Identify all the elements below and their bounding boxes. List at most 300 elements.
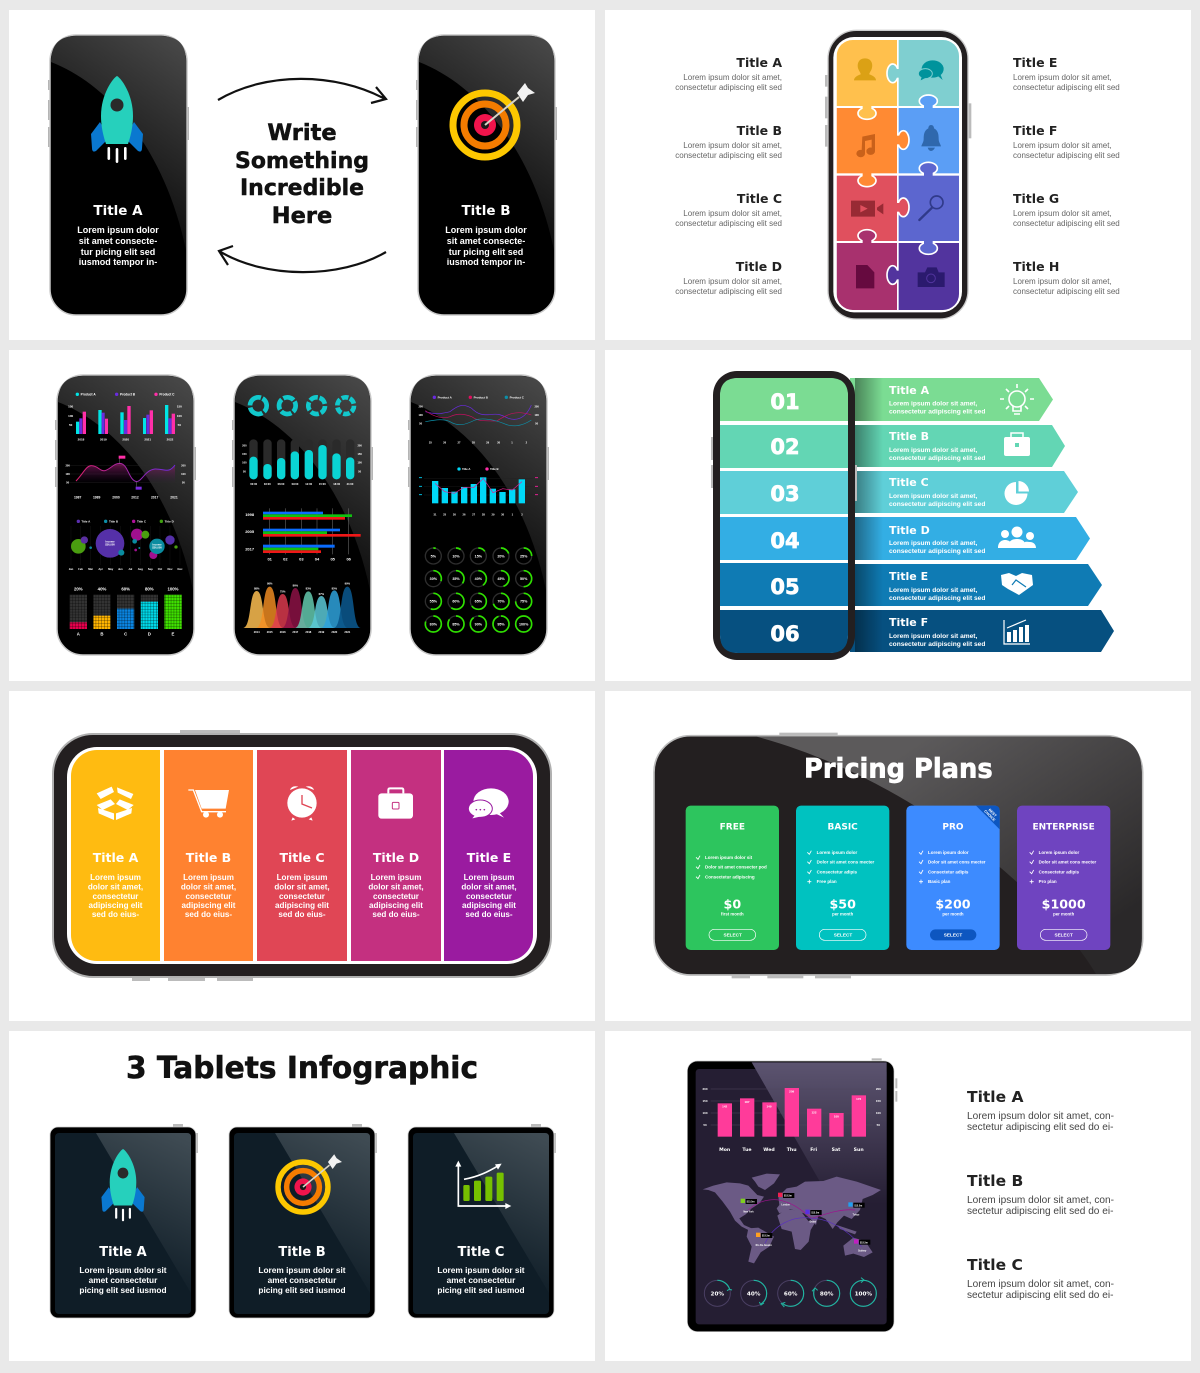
right captions [1013,55,1120,296]
caption: title C: Title C [967,1256,1023,1274]
icon: handshake [1001,573,1033,595]
caption: title A: sectetur adipiscing elit sed do ei- [967,1122,1113,1133]
legend: products: Product A [438,395,453,399]
chart: progress rings: 40% [747,1291,761,1297]
chart: bubbles: Title C [137,519,147,523]
right captions: consectetur adipiscing elit sed [1013,287,1120,296]
chart: capsule bars: 18:00 [333,482,341,486]
panel: three chart phones [9,350,595,681]
center headline: Here [272,203,332,229]
chart: waffle percent: A [77,632,81,637]
tablet B [229,1124,377,1318]
numbered phone [711,371,857,660]
chart: area wave: 100 [65,472,70,476]
plan: pro: Basic plan [928,879,951,884]
column texts [88,850,517,919]
chart: progress rings: 15% [475,554,483,558]
phone numbers: 04 [770,529,800,553]
chart: line series: 30 [497,440,501,444]
chart: area wave [65,456,186,499]
chart: bars with line: 25 [443,513,447,517]
chart: world map: Dubai [810,1222,816,1224]
chart: bars with line: 29 [492,513,495,517]
chart: bell curves: 2015 [267,630,273,634]
chart: grouped bars: 50 [69,423,73,427]
plan: basic: $50 [829,897,856,912]
chart: grouped bars: 150 [177,405,182,409]
column texts: dolor sit amet, [88,882,143,892]
right captions: Lorem ipsum dolor sit amet, [1013,277,1112,286]
legend: products: Product B [474,395,489,399]
chart: capsule bars: 150 [242,452,247,456]
caption: title A: Title A [967,1088,1024,1106]
chart: world map: $15.5m [860,1242,868,1244]
chart: weekly bars: 50 [877,1123,880,1127]
chart: horizontal bars: 1998 [245,512,255,517]
phone: bars, wave, bubbles, waffles [55,375,196,655]
right captions: Lorem ipsum dolor sit amet, [1013,209,1112,218]
icon: document [856,265,874,288]
chart: progress rings: 35% [452,577,460,581]
column texts: adipiscing elit [89,901,143,910]
chart: bubbles: Mar [88,567,93,571]
plan: free: $0 [724,897,741,912]
phone A text [77,225,159,267]
chart: progress rings: 60% [784,1291,798,1297]
chart: area wave: 50 [182,480,185,484]
left captions: Lorem ipsum dolor sit amet, [683,277,782,286]
plan: pro: per month [942,912,964,917]
right captions: Lorem ipsum dolor sit amet, [1013,141,1112,150]
column texts: consectetur [373,892,420,901]
caption: title B [967,1172,1114,1217]
column texts: sed do eius- [465,910,513,919]
column texts: consectetur [466,892,513,901]
tablet A text [79,1265,167,1295]
tablet A title: Title A [99,1245,147,1260]
chart: waffle percent: 100% [167,587,179,592]
chart: grouped bars: 150 [68,405,73,409]
column texts: adipiscing elit [275,901,329,910]
tablet C text [437,1265,525,1295]
plan: free: first month [721,912,744,917]
center headline [235,120,369,229]
right captions: Lorem ipsum dolor sit amet, [1013,73,1112,82]
chart: line series: 28 [472,440,475,444]
phone A text: tur picing elit sed [81,247,155,257]
banner texts [889,384,985,648]
right captions: consectetur adipiscing elit sed [1013,151,1120,160]
chart: horizontal bars: 02 [283,557,288,562]
legend: products: Product C [159,392,175,396]
chart: line series: 100 [534,413,539,417]
panel: numbered phone with arrows [605,350,1191,681]
tablet B text: picing elit sed iusmod [258,1285,346,1295]
chart: bars with line: Title B [490,467,499,471]
tablet C text: amet consectetur [447,1275,516,1285]
plan: basic: per month [832,912,854,917]
chart: bell curves [243,581,361,634]
plan: enterprise: Pro plan [1039,879,1057,884]
chart: bubbles: Nov [167,567,173,571]
chart: bubbles: Oct [158,567,162,571]
banner texts: Lorem ipsum dolor sit amet, [889,400,977,408]
chart: bubbles: Title D [165,519,175,523]
chart: line series [418,405,539,444]
column texts: sed do eius- [185,910,232,919]
chart: weekly bars: 100 [703,1111,708,1115]
chart: weekly bars: Sat [832,1147,841,1153]
banner texts: Title E [889,570,928,583]
column texts: Title B [186,850,231,865]
chart: grouped bars: 2022 [167,437,174,441]
chart: bubbles: Jan [69,567,74,571]
chart: capsule bars: 06:00 [278,482,285,486]
pricing phone body [654,733,1143,978]
chart: bars with line: 1 [512,513,514,517]
chart: bell curves: 2018 [305,630,312,634]
chart: capsule bars: 200 [357,443,362,447]
chart: progress rings: 10% [452,554,460,558]
phone B: target [416,35,557,315]
chart: world map: New York [743,1212,754,1214]
chart: horizontal bars: 05 [330,557,336,562]
phone A text: sit amet consecte- [79,236,157,246]
left captions: consectetur adipiscing elit sed [675,219,782,228]
chart: bubbles: Apr [98,567,103,571]
chart: bars with line: Title A [462,467,470,471]
chart: bubbles: Income [105,540,115,544]
left captions: Title B [737,123,782,138]
left captions: Title D [736,259,782,274]
plan: pro: $200 [935,897,971,912]
icon: growth chart [455,1161,511,1209]
chart: bubbles: Title B [109,519,119,523]
chart: world map: Sydney [858,1251,867,1253]
plan: enterprise: per month [1053,912,1075,917]
plan: basic: Free plan [817,879,837,884]
banner texts: Lorem ipsum dolor sit amet, [889,447,977,454]
phone numbers: 05 [770,575,800,599]
column texts: sed do eius- [92,910,139,919]
chart: weekly bars: 200 [876,1087,881,1091]
column texts: Lorem ipsum [371,873,421,882]
chart: bars with line: 31 [434,513,437,517]
icon: light bulb [1000,384,1034,414]
column texts: consectetur [186,892,232,901]
phone B title: Title B [461,203,511,219]
chart: bell curves: 2017 [292,630,299,634]
caption: title A [967,1088,1114,1133]
panel: pricing plans [605,691,1191,1021]
chart: bell curves: 88% [254,587,260,591]
chart: bars with line: 26 [453,513,456,517]
legend: products: Product B [120,392,136,396]
icon: alarm clock [287,786,317,821]
column texts: dolor sit amet, [461,882,517,892]
center headline: Write [267,120,337,146]
chart: weekly bars: 150 [876,1099,881,1103]
chart: bell curves: 99% [345,581,351,585]
chart: world map: $15.5m [854,1205,862,1207]
chart: waffle percent: E [172,632,175,637]
chart: area wave: 1987 [74,495,82,499]
chart: waffle percent: 60% [121,587,130,592]
chart: progress rings: 80% [820,1291,834,1297]
chart: weekly bars: 149 [767,1104,772,1108]
phone numbers: 02 [770,435,800,459]
chart: progress rings [704,1278,876,1307]
left captions: Lorem ipsum dolor sit amet, [683,73,782,82]
chart: weekly bars: 50 [703,1123,707,1127]
left captions: consectetur adipiscing elit sed [675,151,782,160]
chart: weekly bars: 100 [834,1115,839,1119]
chart: weekly bars: Thu [787,1147,797,1153]
chart: grouped bars: 2020 [122,437,129,441]
plan: enterprise: Dolor sit amet cons mecter [1039,859,1096,864]
chart: weekly bars: 122 [812,1110,817,1114]
plan: pro: SELECT [944,933,962,938]
chart: weekly bars: 100 [876,1111,881,1115]
chart: progress rings: 75% [520,600,528,604]
icon: user [854,58,876,80]
chart: line series: 50 [535,421,539,425]
chart: area wave: 2021 [170,495,178,499]
chart: weekly bars: 200 [703,1087,708,1091]
chart: horizontal bars: 04 [315,557,320,562]
plan: enterprise: $1000 [1042,897,1086,912]
plan: enterprise: Consectetur adipis [1039,869,1080,874]
chart: world map: $15.5m [762,1236,770,1238]
panel: landscape phone with columns [9,691,595,1021]
chart: weekly bars: 172 [856,1097,861,1101]
chart: line series: 200 [418,405,423,409]
pricing title: Pricing Plans [804,754,993,785]
chart: bell curves: 2016 [280,630,286,634]
left captions [675,55,782,296]
column texts: consectetur [279,892,326,901]
plan: enterprise: ENTERPRISE [1033,823,1095,833]
chart: progress rings: 100% [855,1291,872,1297]
plan: enterprise: Lorem ipsum dolor [1039,850,1080,855]
chart: line series: 26 [443,440,447,444]
caption: title C [967,1256,1114,1301]
chart: bell curves: 83% [306,587,312,591]
chart: waffle percent: 20% [74,587,83,592]
chart: area wave: 2012 [131,495,139,499]
chart: line series: 2 [526,440,528,444]
banner texts: Title B [889,430,929,443]
chart: capsule bars: 21:00 [347,482,354,486]
column texts: Title C [279,850,325,865]
chart: progress rings: 30% [430,577,438,581]
chart: progress rings: 20% [711,1291,724,1297]
chart: area wave: 200 [65,463,70,467]
plan: basic: Dolor sit amet cons mecter [817,859,874,864]
chart: horizontal bars: 2017 [245,546,255,551]
chart: line series: 200 [534,405,539,409]
chart: progress rings: 65% [475,600,483,604]
chart: progress rings: 60% [452,600,460,604]
chart: weekly bars: 209 [789,1090,794,1094]
column texts: consectetur [93,892,139,901]
best choice ribbon: BEST [988,808,998,818]
tablet B title: Title B [278,1245,326,1260]
plan: free: SELECT [723,933,742,938]
chart: capsule bars: 100 [357,461,362,465]
column texts: Title A [93,850,139,865]
chart: line series: 50 [419,421,423,425]
column texts: adipiscing elit [182,901,236,910]
legend: products: Product A [81,392,96,396]
chart: bubbles [69,519,183,571]
tablet C [408,1124,556,1318]
plan: basic [796,806,889,950]
icon: video camera [851,201,883,217]
icon: briefcase [378,788,413,819]
chart: progress rings: 80% [430,622,438,626]
chart: bubbles: Jun [118,567,123,571]
plan: basic: SELECT [834,933,852,938]
caption: title B: Title B [967,1172,1023,1190]
chart: line series: 1 [511,440,513,444]
legend: products: Product C [510,395,525,399]
chart: world map: $15.5m [784,1196,792,1198]
chart: weekly bars: Mon [719,1147,730,1153]
icon: box [97,787,134,820]
banner texts: consectetur adipiscing elit sed [889,548,985,555]
chart: weekly bars: Tue [742,1147,752,1153]
plan: free: FREE [720,823,745,833]
chart: area wave: 200 [181,463,186,467]
column texts: sed do eius- [372,910,420,919]
chart: waffle percent: 80% [145,587,154,592]
chart: progress rings: 70% [497,600,505,604]
phone A text: iusmod tempor in- [79,257,157,267]
banner texts: consectetur adipiscing elit sed [889,595,985,602]
left captions: Lorem ipsum dolor sit amet, [683,209,782,218]
best choice ribbon: CHOICE [983,809,996,823]
chart: capsule bars [242,439,362,486]
chart: world map: $15.5m [811,1213,819,1215]
chart: capsule bars: 150 [357,452,362,456]
right captions: Title E [1013,55,1057,70]
chart: capsule bars: 100 [242,461,247,465]
plan: free [686,806,779,950]
chart: line series: 25 [429,440,432,444]
legend: products [76,392,175,396]
chart: waffle percent [70,587,182,637]
banner texts: Lorem ipsum dolor sit amet, [889,540,977,547]
chart: capsule bars: 15:00 [319,482,326,486]
column texts: sed do eius- [278,910,326,919]
banner texts: consectetur adipiscing elit sed [889,501,985,508]
column texts: Title E [467,850,511,865]
chart: bars with line [419,467,538,517]
chart: weekly bars: Wed [763,1147,775,1153]
tablet B text [258,1265,346,1295]
plan: pro: Dolor sit amet cons mecter [928,859,986,864]
icon: cart [188,790,229,818]
caption: title C: Lorem ipsum dolor sit amet, con- [967,1279,1114,1290]
chart: horizontal bars: 2005 [245,529,255,534]
chart: bubbles: Income [152,542,162,546]
chart: grouped bars: 100 [177,414,182,418]
chart: grouped bars [68,405,182,441]
chart: capsule bars: 50 [358,469,362,473]
chart: bell curves: 2019 [318,630,325,634]
chart: bubbles: $36,000 [105,543,115,547]
chart: bubbles: Aug [138,567,143,571]
chart: horizontal bars: 03 [299,557,304,562]
chart: bars with line: 27 [472,513,476,517]
chart: progress rings: 20% [497,554,505,558]
icon: music note [856,134,875,157]
icon: target with arrow [453,83,535,157]
left captions: consectetur adipiscing elit sed [675,287,782,296]
caption: title B: Lorem ipsum dolor sit amet, con- [967,1195,1114,1206]
phone A: rocket [48,35,189,315]
phone: lines, combo, progress rings [408,375,549,655]
chart: bubbles: Sep [148,567,153,571]
chart: weekly bars: Sun [854,1147,864,1153]
arrow: bottom curve [219,246,386,272]
phone B text: iusmod tempor in- [447,257,525,267]
chart: area wave: 2017 [151,495,159,499]
plan: enterprise [1017,806,1110,950]
plan: pro [906,806,1000,950]
panel: puzzle phone [605,10,1191,340]
puzzle phone [825,30,971,319]
chart: capsule bars: 00:00 [250,482,258,486]
chart: horizontal bars: 01 [267,557,273,562]
chart: capsule bars: 03:00 [264,482,271,486]
chart: progress rings: 5% [431,554,437,558]
plan: free: Consectetur adipiscing [705,874,755,879]
column texts: Lorem ipsum [464,873,514,882]
chart: capsule bars: 50 [243,469,246,473]
chart: progress rings: 90% [475,622,483,626]
chart: area wave: 1989 [93,495,101,499]
phone B text: sit amet consecte- [447,236,525,246]
left captions: Lorem ipsum dolor sit amet, [683,141,782,150]
icon: rocket [101,1149,145,1221]
phone numbers: 03 [770,482,800,506]
chart: grouped bars: 50 [178,423,181,427]
column texts: Lorem ipsum [183,873,234,882]
chart: grouped bars: 2018 [78,437,85,441]
chart: grouped bars: 2019 [100,437,107,441]
chart: waffle percent: 40% [98,587,106,592]
chart: area wave: 50 [66,480,70,484]
landscape phone body [53,730,551,981]
banner texts: consectetur adipiscing elit sed [889,641,985,648]
column texts: dolor sit amet, [181,882,236,892]
chart: progress rings: 25% [520,554,528,558]
arrow banners [850,378,1114,652]
icon: bell [921,125,941,151]
left captions: Title A [736,55,782,70]
tablet A text: picing elit sed iusmod [79,1285,167,1295]
chart: progress rings: 40% [475,577,483,581]
chart: bell curves: 85% [332,587,338,591]
center headline: Incredible [240,175,364,201]
chart: area wave: 100 [181,472,186,476]
chart: world map: Tokyo [853,1214,860,1216]
chart: grouped bars: 2021 [144,437,151,441]
phone B text: Lorem ipsum dolor [445,225,527,235]
chart: progress rings: 50% [520,577,528,581]
